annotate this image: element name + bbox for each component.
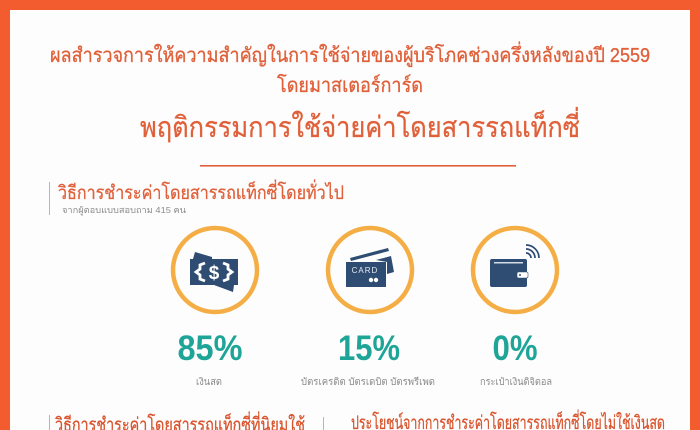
icon: payment cards: CARD [352, 266, 378, 275]
column: digital wallet [473, 228, 557, 388]
title: survey heading [50, 41, 650, 97]
column: cash [173, 228, 257, 388]
title: main heading: พฤติกรรมการใช้จ่ายค่าโดยสารรถแท็กซี่ [140, 107, 580, 144]
label: cards: บัตรเครดิต บัตรเดบิต บัตรพรีเพด [301, 376, 435, 388]
section heading: general payment methods: จากผู้ตอบแบบสอบถาม 415 คน [62, 205, 186, 216]
icon: payment cards [328, 228, 412, 312]
icon: cash banknotes [173, 228, 257, 312]
percentage: 85%: 85% [178, 329, 242, 368]
label: cash: เงินสด [196, 377, 222, 388]
percentage: 0%: 0% [492, 329, 538, 368]
column: cards [301, 228, 435, 388]
percentage: 15%: 15% [338, 329, 400, 368]
title: survey heading: โดยมาสเตอร์การ์ด [277, 74, 423, 97]
icon: cash banknotes: $ [209, 263, 220, 284]
section heading: general payment methods: วิธีการชำระค่าโดยสารรถแท็กซี่โดยทั่วไป [58, 179, 344, 204]
icon: digital wallet [473, 228, 557, 312]
section heading: general payment methods [49, 179, 344, 216]
label: digital wallet: กระเป๋าเงินดิจิตอล [480, 376, 552, 388]
title: survey heading: ผลสำรวจการให้ความสำคัญในการใช้จ่ายของผู้บริโภคช่วงครึ่งหลังของปี 2559 [50, 41, 650, 68]
